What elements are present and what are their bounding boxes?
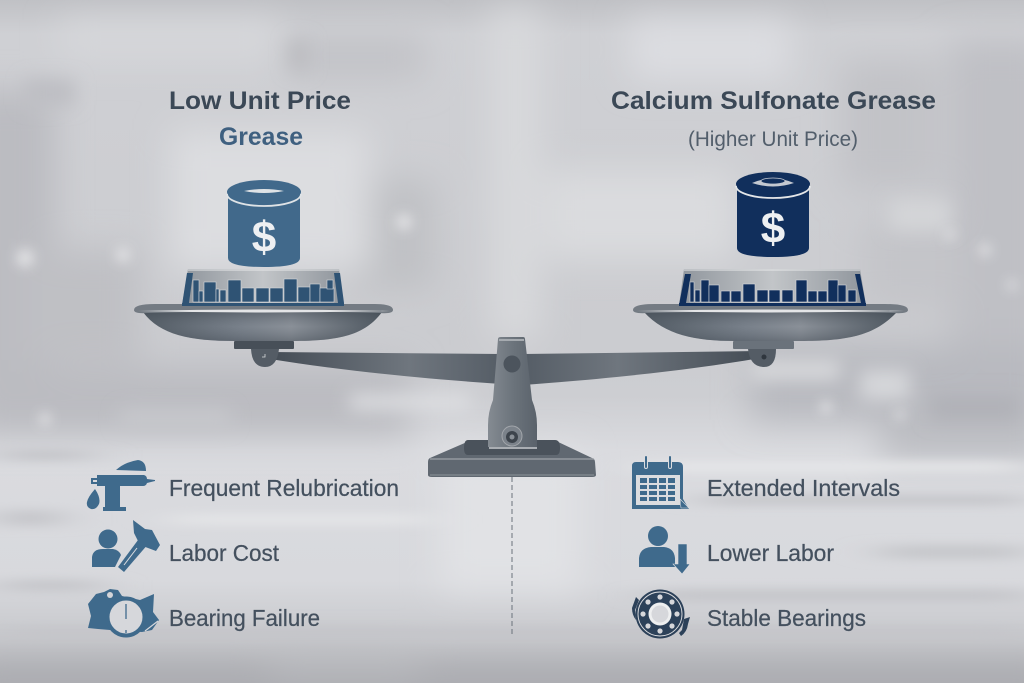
icon: low price grease can	[227, 180, 301, 267]
center dashed divider	[511, 477, 513, 636]
icon: worker with hammer	[92, 520, 160, 572]
icon: calendar	[632, 457, 689, 509]
left list: frequent relubrication	[87, 460, 399, 511]
icon: low price grease can: $	[252, 213, 276, 262]
heading: low unit price grease	[169, 87, 351, 151]
icon: grease gun	[87, 460, 155, 511]
left list: labor cost: Labor Cost	[169, 540, 280, 566]
icon: calcium sulfonate grease can	[736, 172, 810, 257]
left list: labor cost	[92, 520, 280, 572]
right list: extended intervals: Extended Intervals	[707, 475, 900, 501]
right list: stable bearings: Stable Bearings	[707, 605, 866, 631]
right list: stable bearings	[632, 590, 866, 638]
scale: center post and base	[428, 337, 596, 477]
heading: calcium sulfonate grease	[611, 87, 936, 151]
right list: extended intervals	[632, 457, 900, 509]
icon: damaged bearing gauge	[88, 589, 159, 636]
icon: calcium sulfonate grease can: $	[761, 204, 785, 253]
scale: beam	[270, 351, 760, 385]
left band with skyline	[182, 269, 344, 306]
heading: calcium sulfonate grease: (Higher Unit Price)	[688, 128, 858, 151]
left list: bearing failure: Bearing Failure	[169, 605, 320, 631]
heading: low unit price grease: Low Unit Price	[169, 87, 351, 115]
icon: ball bearing with rotation arrows	[632, 590, 690, 638]
heading: calcium sulfonate grease: Calcium Sulfonate Grease	[611, 87, 936, 115]
right list: lower labor: Lower Labor	[707, 540, 834, 566]
scale: right pan	[633, 304, 908, 367]
right list: lower labor	[639, 526, 834, 574]
icon: person with down arrow	[639, 526, 690, 574]
scale: left pan	[134, 304, 393, 367]
heading: low unit price grease: Grease	[219, 123, 303, 151]
right band with skyline	[679, 269, 866, 306]
left list: frequent relubrication: Frequent Relubrication	[169, 475, 399, 501]
left list: bearing failure	[88, 589, 320, 636]
